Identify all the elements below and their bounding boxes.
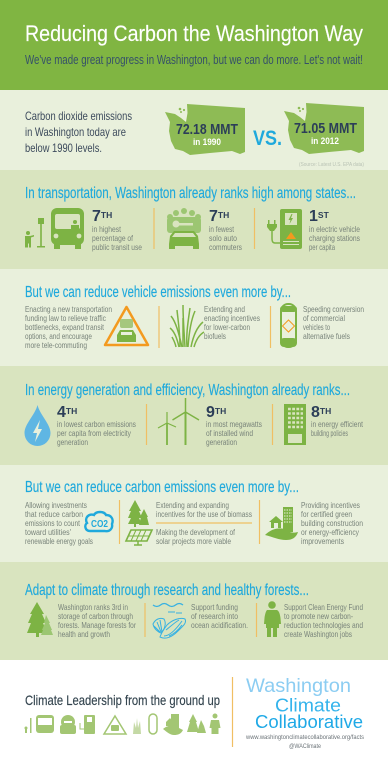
text: biofuels: enacting incentives <box>204 313 260 323</box>
icon: person <box>264 601 281 637</box>
text: forests: storage of carbon through <box>58 611 133 621</box>
map: Washington 2012: in 2012 <box>311 136 339 146</box>
text: green building: Providing incentives <box>301 500 360 510</box>
panel: transportation rankings <box>0 170 388 269</box>
text: transportation funding: Enacting a new transportation <box>25 304 112 314</box>
stat: 1st EV charging: charging stations <box>309 233 360 243</box>
stat: 7th solo commuters: in fewest <box>209 224 234 234</box>
icon row <box>24 714 220 735</box>
stat: 7th solo commuters: commuters <box>209 242 242 252</box>
icon: wind turbines <box>158 398 199 445</box>
stat: 7th public transit: percentage of <box>92 233 133 243</box>
stat: 7th public transit <box>92 208 142 252</box>
stat: 1st EV charging: in electric vehicle <box>309 224 360 234</box>
text: forests: forests. Manage forests for <box>58 620 136 630</box>
stat: 4th carbon emissions <box>57 404 136 447</box>
panel: emissions comparison <box>0 90 388 171</box>
icon: carpool <box>167 208 201 249</box>
text: green building: or energy-efficiency <box>301 527 360 537</box>
icon: biofuel grass <box>170 305 204 347</box>
logo: Washington Climate Collaborative: Collaborative <box>255 712 363 732</box>
stat: 8th building policies <box>311 404 363 438</box>
text: renewable investments: toward utilities' <box>25 527 71 537</box>
stat: 4th carbon emissions: per capita from electricity <box>57 428 132 438</box>
stat: 7th solo commuters: solo auto <box>209 233 237 243</box>
text: clean energy fund: create Washington jobs <box>284 629 352 639</box>
logo: Washington Climate Collaborative <box>246 675 363 732</box>
stat: 7th public transit: 7 <box>92 208 101 225</box>
stat: 4th carbon emissions: in lowest carbon emissions <box>57 419 136 429</box>
text: renewable investments: emissions to count <box>25 518 80 528</box>
text: clean energy fund: Support Clean Energy Fund <box>284 602 363 612</box>
icon: electric charging station <box>267 209 302 249</box>
text: biofuels: biofuels <box>204 331 226 341</box>
text: transportation funding: options, and encourage <box>25 331 92 341</box>
icon: trees biomass <box>128 500 149 527</box>
source note: (Source: Latest U.S. EPA data) <box>299 162 364 168</box>
map: Washington 2012 <box>284 103 364 154</box>
footer tagline: Climate Leadership from the ground up <box>25 692 220 708</box>
text: transportation funding: more tele-commuting <box>25 340 87 350</box>
text: biomass: incentives for the use of biomass <box>156 509 252 519</box>
text: renewable investments: renewable energy goals <box>25 536 93 546</box>
stat: 4th carbon emissions: generation <box>57 437 88 447</box>
text: alternative fuels: vehicles to <box>303 322 330 332</box>
icon: efficient building <box>284 404 306 445</box>
twitter handle: @WAClimate <box>289 744 322 750</box>
stat: 1st EV charging: per capita <box>309 242 335 252</box>
icon: water drop with lightning <box>24 405 50 446</box>
map: Washington 1990: in 1990 <box>193 137 221 147</box>
text: clean energy fund: reduction technologies and <box>284 620 363 630</box>
text: alternative fuels: of commercial <box>303 313 345 323</box>
stat: 8th building policies: 8 <box>311 404 320 421</box>
text: ocean acidification: of research into <box>191 611 238 621</box>
stat: 7th public transit: in highest <box>92 224 121 234</box>
stat: 7th solo commuters: 7 <box>209 208 218 225</box>
stat: 7th solo commuters <box>209 208 242 252</box>
stat: 9th wind generation: generation <box>206 437 237 447</box>
stat: 9th wind generation <box>206 404 262 447</box>
panel: title header <box>0 0 388 90</box>
stat: 7th solo commuters: TH <box>218 210 229 220</box>
text: transportation funding: funding law to relieve traffic <box>25 313 107 323</box>
map: Washington 1990: 72.18 MMT <box>176 122 238 138</box>
text: biofuels: Extending and <box>204 304 245 314</box>
stat: 4th carbon emissions: 4 <box>57 404 66 421</box>
text: renewable investments: that reduce carbon <box>25 509 83 519</box>
text: clean energy fund: to promote new carbon- <box>284 611 353 621</box>
panel: reduce carbon emissions <box>0 465 388 562</box>
icon: CO2 cloud: CO2 <box>91 519 108 530</box>
icon: CO2 cloud <box>85 512 113 531</box>
stat: 9th wind generation: 9 <box>206 404 215 421</box>
text: emissions statement: Carbon dioxide emissions <box>25 109 132 123</box>
text: biomass: Extending and expanding <box>156 500 229 510</box>
text: alternative fuels: alternative fuels <box>303 331 350 341</box>
website address: www.washingtonclimatecollaborative.org/facts <box>245 735 364 741</box>
label: vs: VS. <box>253 127 282 150</box>
stat: 9th wind generation: TH <box>215 406 226 416</box>
panel: reduce vehicle emissions <box>0 269 388 366</box>
stat: 7th public transit: public transit use <box>92 242 142 252</box>
icon: fuel tank <box>280 304 297 347</box>
stat: 7th public transit: TH <box>101 210 112 220</box>
text: solar: Making the development of <box>156 527 235 537</box>
panel: footer <box>0 660 388 760</box>
icon: forest <box>27 602 53 637</box>
text: green building: for certified green <box>301 509 352 519</box>
text: renewable investments: Allowing investments <box>25 500 87 510</box>
text: emissions statement: below 1990 levels. <box>25 141 102 155</box>
panel: climate adaptation <box>0 562 388 660</box>
text: transportation funding: bottlenecks, expand transit <box>25 322 104 332</box>
text: ocean acidification: Support funding <box>191 602 238 612</box>
stat: 9th wind generation: of installed wind <box>206 428 253 438</box>
text: ocean acidification: ocean acidification. <box>191 620 248 630</box>
icon: bus and rider <box>25 208 84 249</box>
stat: 8th building policies: in energy efficient <box>311 419 363 429</box>
text: emissions statement: in Washington today are <box>25 125 126 139</box>
stat: 8th building policies: TH <box>320 406 331 416</box>
stat: 9th wind generation: in most megawatts <box>206 419 262 429</box>
icon: solar panel <box>126 530 152 545</box>
icon: green house and building <box>265 507 298 540</box>
text: green building: building construction <box>301 518 363 528</box>
text: biofuels: for lower-carbon <box>204 322 250 332</box>
stat: 1st EV charging <box>309 208 360 252</box>
map: Washington 1990 <box>165 104 245 155</box>
stat: 8th building policies: building policies <box>311 428 348 438</box>
icon: ocean and shells <box>153 604 186 638</box>
logo: Washington Climate Collaborative: Washington <box>246 675 351 697</box>
stat: 1st EV charging: 1 <box>309 208 318 225</box>
text: solar: solar projects more viable <box>156 536 231 546</box>
text: green building: improvements <box>301 536 344 546</box>
map: Washington 2012: 71.05 MMT <box>294 121 357 137</box>
icon: traffic warning triangle <box>105 307 148 345</box>
stat: 1st EV charging: ST <box>318 210 330 220</box>
panel: energy rankings <box>0 366 388 465</box>
stat: 4th carbon emissions: TH <box>66 406 77 416</box>
logo: Washington Climate Collaborative: Climate <box>275 696 341 716</box>
text: forests: health and growth <box>58 629 110 639</box>
text: alternative fuels: Speeding conversion <box>303 304 364 314</box>
text: forests: Washington ranks 3rd in <box>58 602 128 612</box>
